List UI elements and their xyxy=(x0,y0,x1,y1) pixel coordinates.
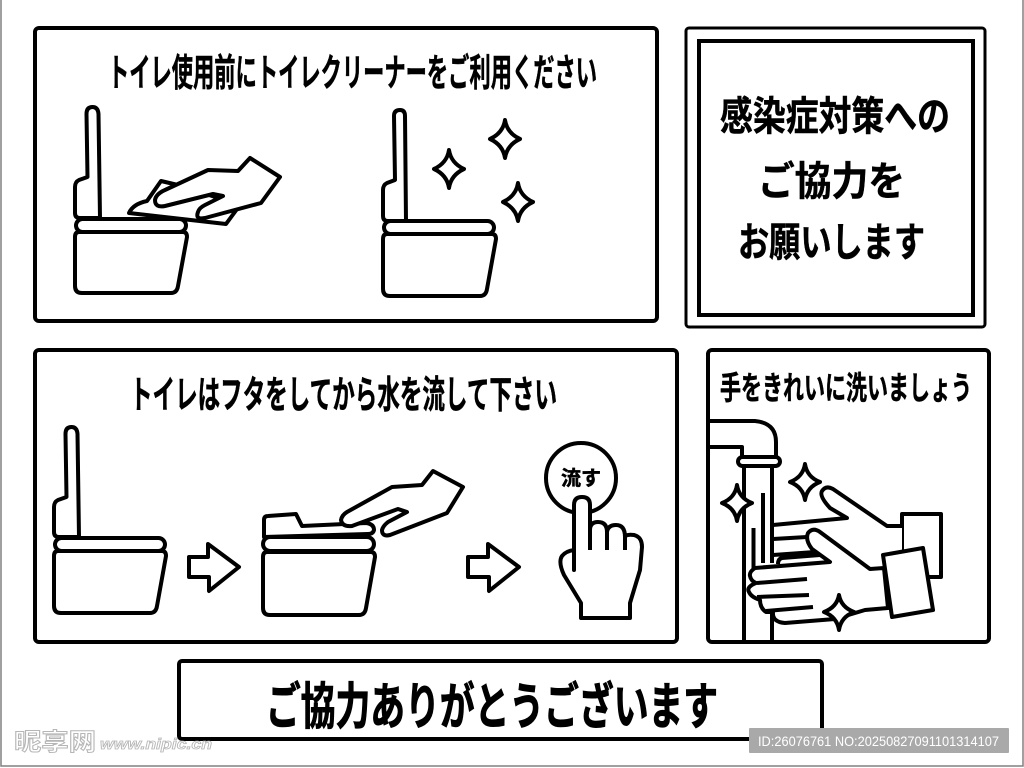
icon: pointing hand xyxy=(560,497,642,618)
illustration: toilet with open lid xyxy=(54,427,166,613)
panel: close lid before flushing xyxy=(35,350,677,642)
icon: sparkle xyxy=(434,150,464,188)
text block: request message: お願いします xyxy=(738,221,925,265)
watermark: site logo: www.nipic.cn xyxy=(100,736,212,753)
illustration: clean toilet xyxy=(383,110,533,296)
watermark: image id: ID:26076761 NO:20250827091101314107 xyxy=(758,733,999,749)
watermark: image id xyxy=(749,728,1009,753)
icon: sparkle xyxy=(503,183,533,221)
watermark: site logo xyxy=(14,729,212,756)
icon: sparkle xyxy=(790,464,820,500)
illustration: wiping seat with cloth xyxy=(75,107,280,293)
text block: request message xyxy=(720,95,950,265)
illustration: faucet and running water xyxy=(708,421,780,640)
illustration: closing the lid xyxy=(263,471,463,615)
icon: sparkle xyxy=(490,120,520,158)
panel: thank you banner xyxy=(179,661,822,739)
illustration: back hand with cuff xyxy=(773,486,941,577)
heading: toilet cleaner: トイレ使用前にトイレクリーナーをご利用ください xyxy=(108,53,597,95)
panel: request for infection control cooperation xyxy=(686,28,985,327)
heading: close lid and flush: トイレはフタをしてから水を流して下さい xyxy=(130,375,557,417)
icon: sparkle xyxy=(824,595,854,630)
text: thank you: ご協力ありがとうございます xyxy=(266,679,718,735)
arrow: next step xyxy=(189,544,239,591)
icon: flush button xyxy=(546,443,616,513)
arrow: next step xyxy=(468,544,519,591)
text block: request message: 感染症対策への xyxy=(720,95,950,139)
illustration: pressing flush button xyxy=(546,443,642,618)
panel: use toilet cleaner before use xyxy=(35,28,657,321)
watermark: site logo: 昵享网 xyxy=(14,729,96,756)
panel: wash your hands xyxy=(708,350,989,642)
icon: flush button: 流す xyxy=(561,467,601,490)
icon: sparkle xyxy=(722,485,752,521)
illustration: front hand with cuff xyxy=(748,530,933,623)
text block: request message: ご協力を xyxy=(758,160,905,204)
